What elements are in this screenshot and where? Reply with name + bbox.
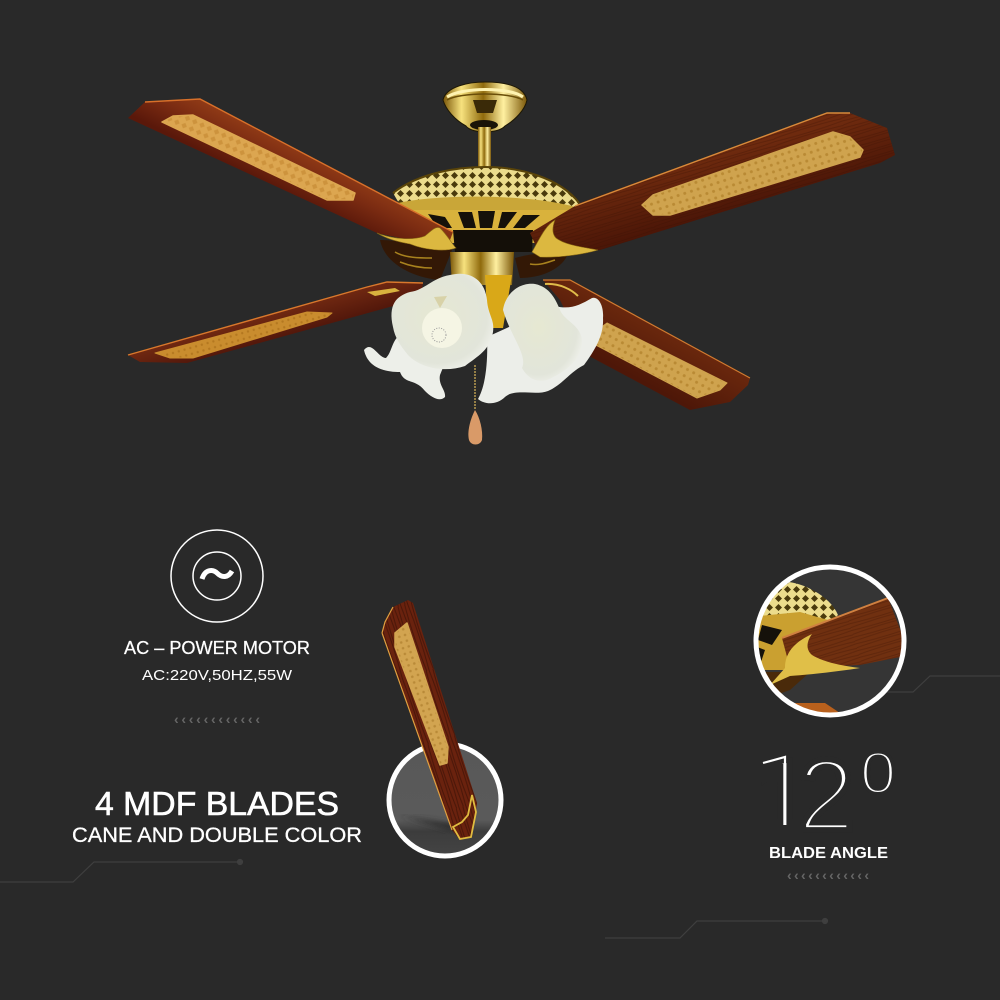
blade angle detail [750,567,910,715]
circuit line: bottom [605,918,828,938]
blade: upper right [530,113,895,257]
glass shade: rear left [364,335,450,399]
canopy [443,82,527,132]
motor housing [380,167,579,328]
light pull chain [468,365,482,444]
disc shadow [400,816,455,832]
ceiling fan illustration [128,82,895,444]
text: AC power motor: AC – POWER MOTOR [124,638,310,658]
chevron divider: left: ‹‹‹‹‹‹‹‹‹‹‹‹ [174,711,260,727]
glass shade: front right [503,284,582,381]
blade detail [382,600,501,856]
angle value: 0 [860,741,896,806]
glass shade: front left [392,274,493,369]
circuit line: left [0,860,242,882]
downrod [478,127,491,168]
light bulb [422,296,462,348]
angle value: 12 [755,740,854,852]
text: blade angle: BLADE ANGLE [769,845,888,862]
blade: lower right [543,280,750,410]
blade: lower left [128,282,423,363]
circuit line: right [887,676,1000,692]
glass shade: rear right [478,298,603,403]
icon: AC power [171,530,263,622]
chevron divider: right: ‹‹‹‹‹‹‹‹‹‹‹‹ [787,867,869,883]
subheading: cane and double color: CANE AND DOUBLE COLOR [72,824,362,847]
detail disc [389,744,501,856]
text: AC specification: AC:220V,50HZ,55W [142,667,293,684]
blade: upper left [128,99,456,250]
heading: 4 MDF blades: 4 MDF BLADES [95,785,339,822]
single blade [382,600,477,840]
